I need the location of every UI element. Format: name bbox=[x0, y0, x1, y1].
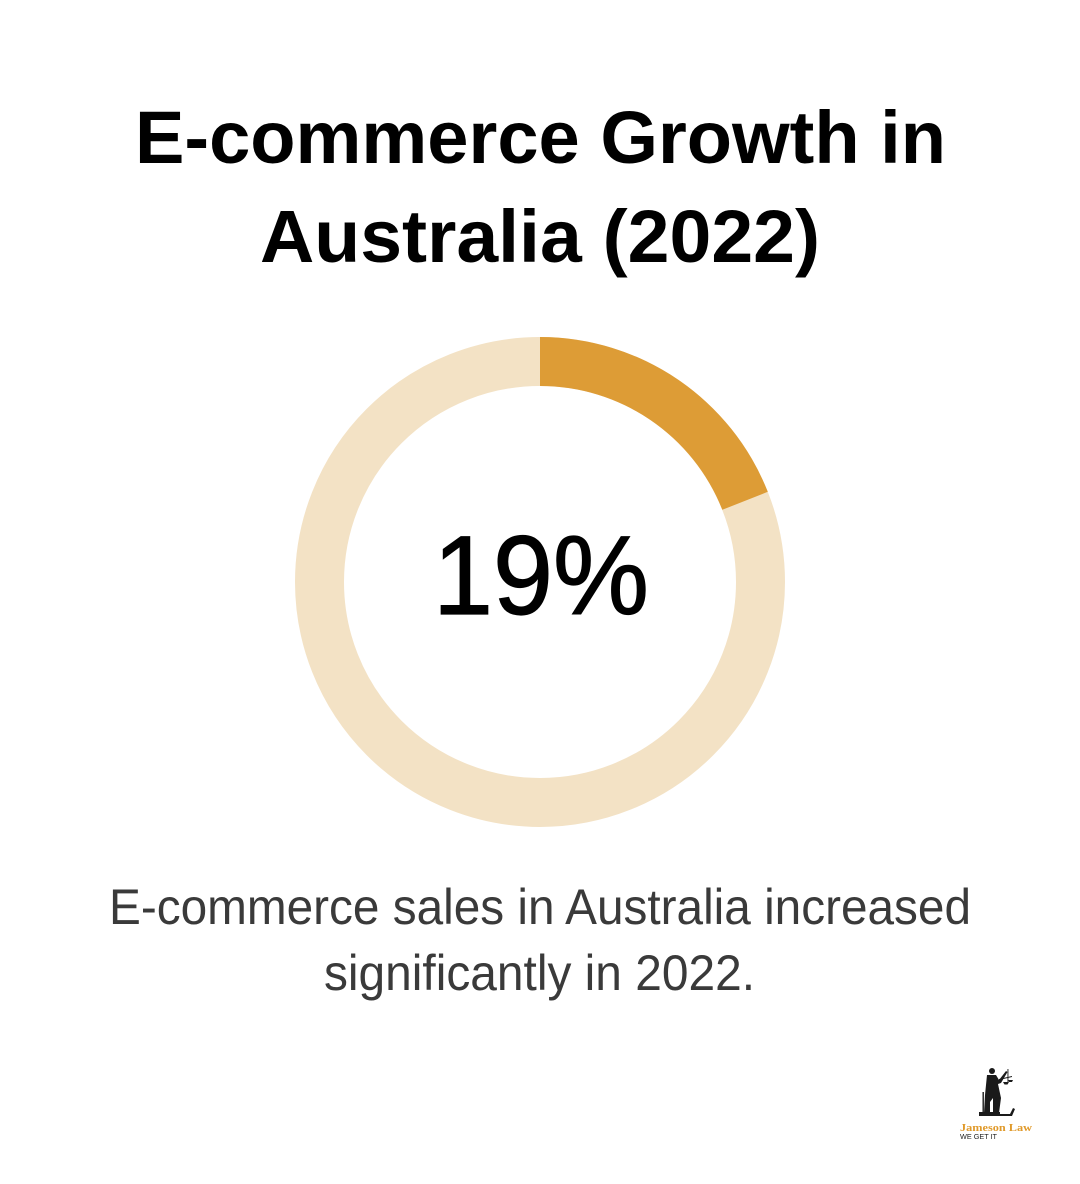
logo tagline: WE GET IT bbox=[960, 1134, 998, 1141]
title bbox=[135, 96, 946, 278]
donut value: 19% bbox=[433, 513, 649, 638]
title: E-commerce Growth in bbox=[135, 96, 946, 179]
description text bbox=[109, 879, 971, 1001]
logo: Jameson Law bbox=[960, 1068, 1032, 1141]
logo name: Jameson Law bbox=[960, 1122, 1032, 1134]
description text: significantly in 2022. bbox=[324, 945, 755, 1001]
title: Australia (2022) bbox=[260, 195, 820, 278]
icon: lady justice bbox=[979, 1068, 1015, 1116]
description text: E-commerce sales in Australia increased bbox=[109, 879, 971, 935]
donut chart: 19% bbox=[320, 337, 768, 802]
